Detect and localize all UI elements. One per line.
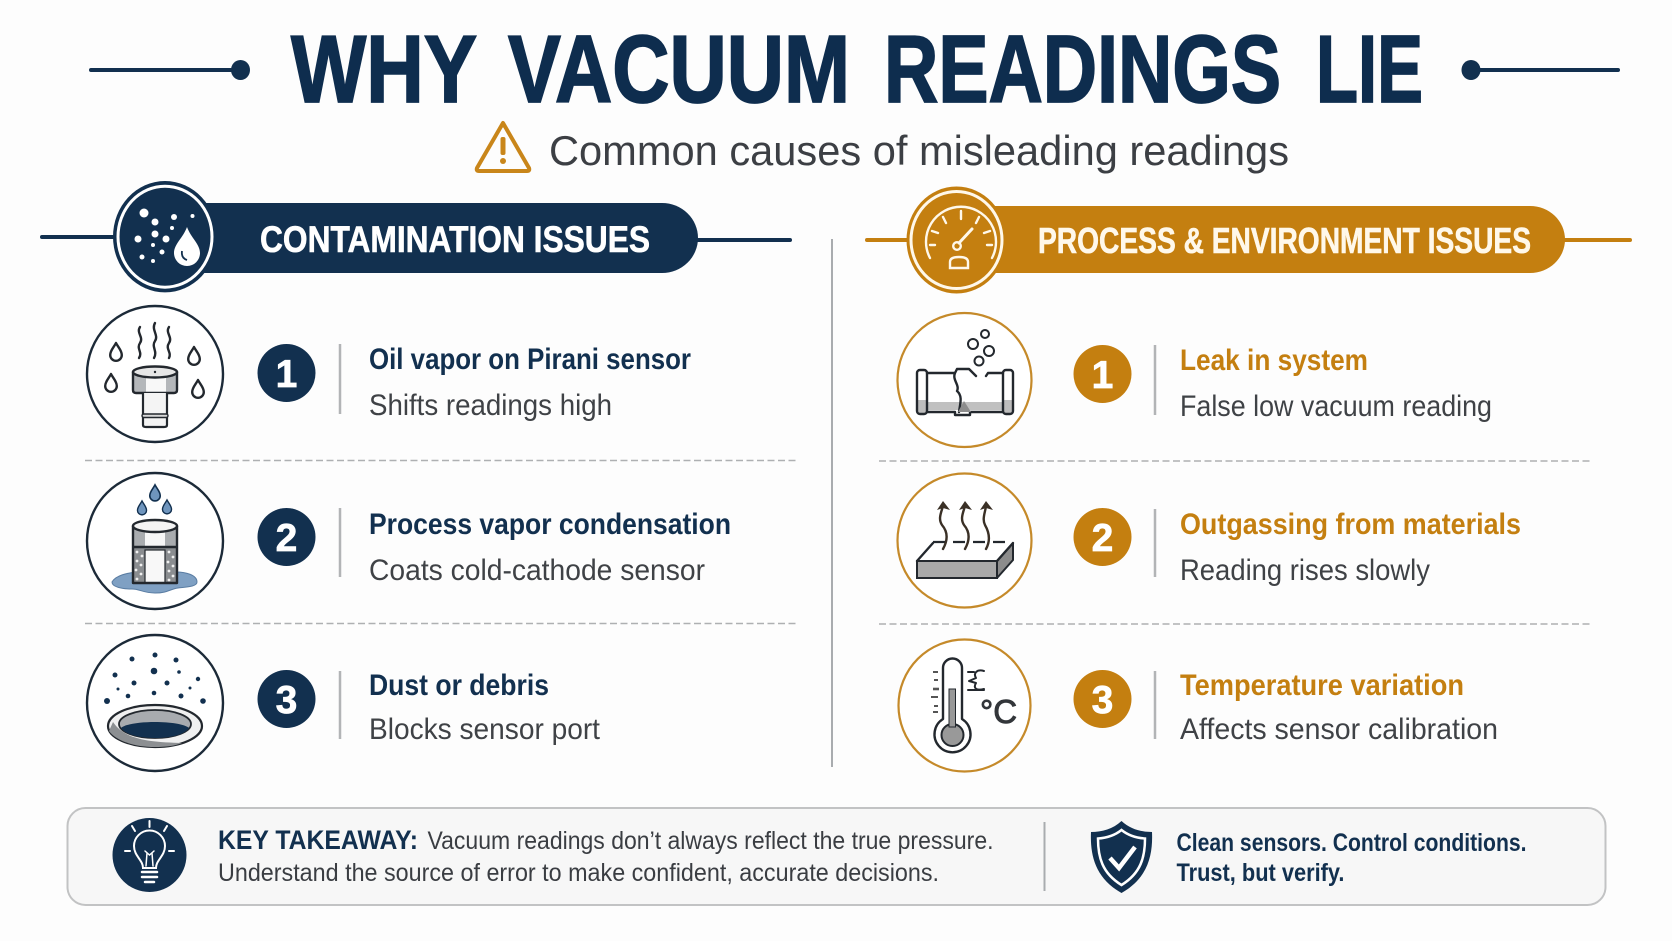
heading: process banner — [867, 186, 1630, 294]
title — [291, 16, 1423, 123]
number 2 — [1074, 508, 1132, 566]
text: temperature: Temperature variation — [1180, 669, 1464, 702]
number 3: 3 — [276, 679, 297, 722]
item: process vapor — [87, 473, 731, 609]
text: leak — [1180, 344, 1492, 423]
number 2: 2 — [1092, 517, 1113, 560]
number 1 — [258, 344, 316, 402]
text: key takeaway: KEY TAKEAWAY: — [218, 825, 418, 855]
number 2 — [258, 508, 316, 566]
title: WHY — [291, 16, 477, 123]
text: oil vapor — [369, 343, 691, 422]
panel: contamination issues — [42, 181, 797, 771]
text: leak: Leak in system — [1180, 344, 1368, 377]
text: outgassing: Outgassing from materials — [1180, 508, 1521, 541]
panel: process and environment issues — [867, 186, 1630, 772]
text: leak: False low vacuum reading — [1180, 390, 1492, 423]
text: dust — [369, 669, 601, 746]
item: outgassing — [898, 474, 1521, 608]
heading: contamination banner — [42, 181, 790, 292]
text: verify reminder: Trust, but verify. — [1176, 859, 1344, 887]
text: dust: Blocks sensor port — [369, 713, 601, 746]
title: READINGS — [884, 16, 1281, 123]
number 2: 2 — [276, 517, 297, 560]
title: LIE — [1316, 16, 1423, 123]
text: key takeaway: Vacuum readings don’t always reflect the true pressure. — [428, 827, 994, 855]
text: verify reminder — [1176, 829, 1526, 887]
text: dust: Dust or debris — [369, 669, 549, 702]
title rule: left — [91, 60, 250, 80]
icon: thermometer — [898, 640, 1030, 772]
icon: light bulb — [112, 818, 186, 892]
panel: key takeaway — [68, 808, 1606, 905]
icon: outgassing slab — [898, 474, 1032, 608]
heading: contamination banner: CONTAMINATION ISSUES — [260, 219, 650, 260]
text: process vapor — [369, 508, 731, 587]
text: oil vapor: Oil vapor on Pirani sensor — [369, 343, 691, 376]
number 1: 1 — [276, 353, 297, 396]
icon: leaking pipe — [898, 313, 1032, 447]
text: process vapor: Process vapor condensation — [369, 508, 731, 541]
icon: oil vapor on sensor — [87, 306, 223, 442]
item: leak — [898, 313, 1492, 447]
icon: shield with check — [1091, 821, 1152, 893]
text: temperature: Affects sensor calibration — [1180, 713, 1498, 746]
icon: dust and sensor port — [87, 635, 223, 771]
icon: vapor condensation — [87, 473, 223, 609]
text: outgassing — [1180, 508, 1521, 587]
text: key takeaway — [218, 825, 994, 887]
number 3 — [1074, 670, 1132, 728]
text: oil vapor: Shifts readings high — [369, 389, 612, 422]
title rule: right — [1462, 60, 1618, 80]
number 3: 3 — [1092, 679, 1113, 722]
text: outgassing: Reading rises slowly — [1180, 554, 1430, 587]
text: verify reminder: Clean sensors. Control conditions. — [1176, 829, 1526, 857]
title: VACUUM — [508, 16, 850, 123]
subtitle: Common causes of misleading readings — [549, 127, 1289, 174]
number 1: 1 — [1092, 354, 1113, 397]
number 3 — [258, 670, 316, 728]
text: process vapor: Coats cold-cathode sensor — [369, 554, 705, 587]
icon: thermometer: °C — [980, 693, 1017, 730]
item: dust — [87, 635, 601, 771]
number 1 — [1074, 345, 1132, 403]
icon: warning triangle — [477, 123, 529, 171]
item: oil vapor — [87, 306, 691, 442]
text: key takeaway: Understand the source of error to make confident, accurate decisions. — [218, 859, 939, 887]
item: temperature — [898, 640, 1498, 772]
heading: process banner: PROCESS & ENVIRONMENT ISSUES — [1038, 220, 1531, 261]
text: temperature — [1180, 669, 1498, 746]
